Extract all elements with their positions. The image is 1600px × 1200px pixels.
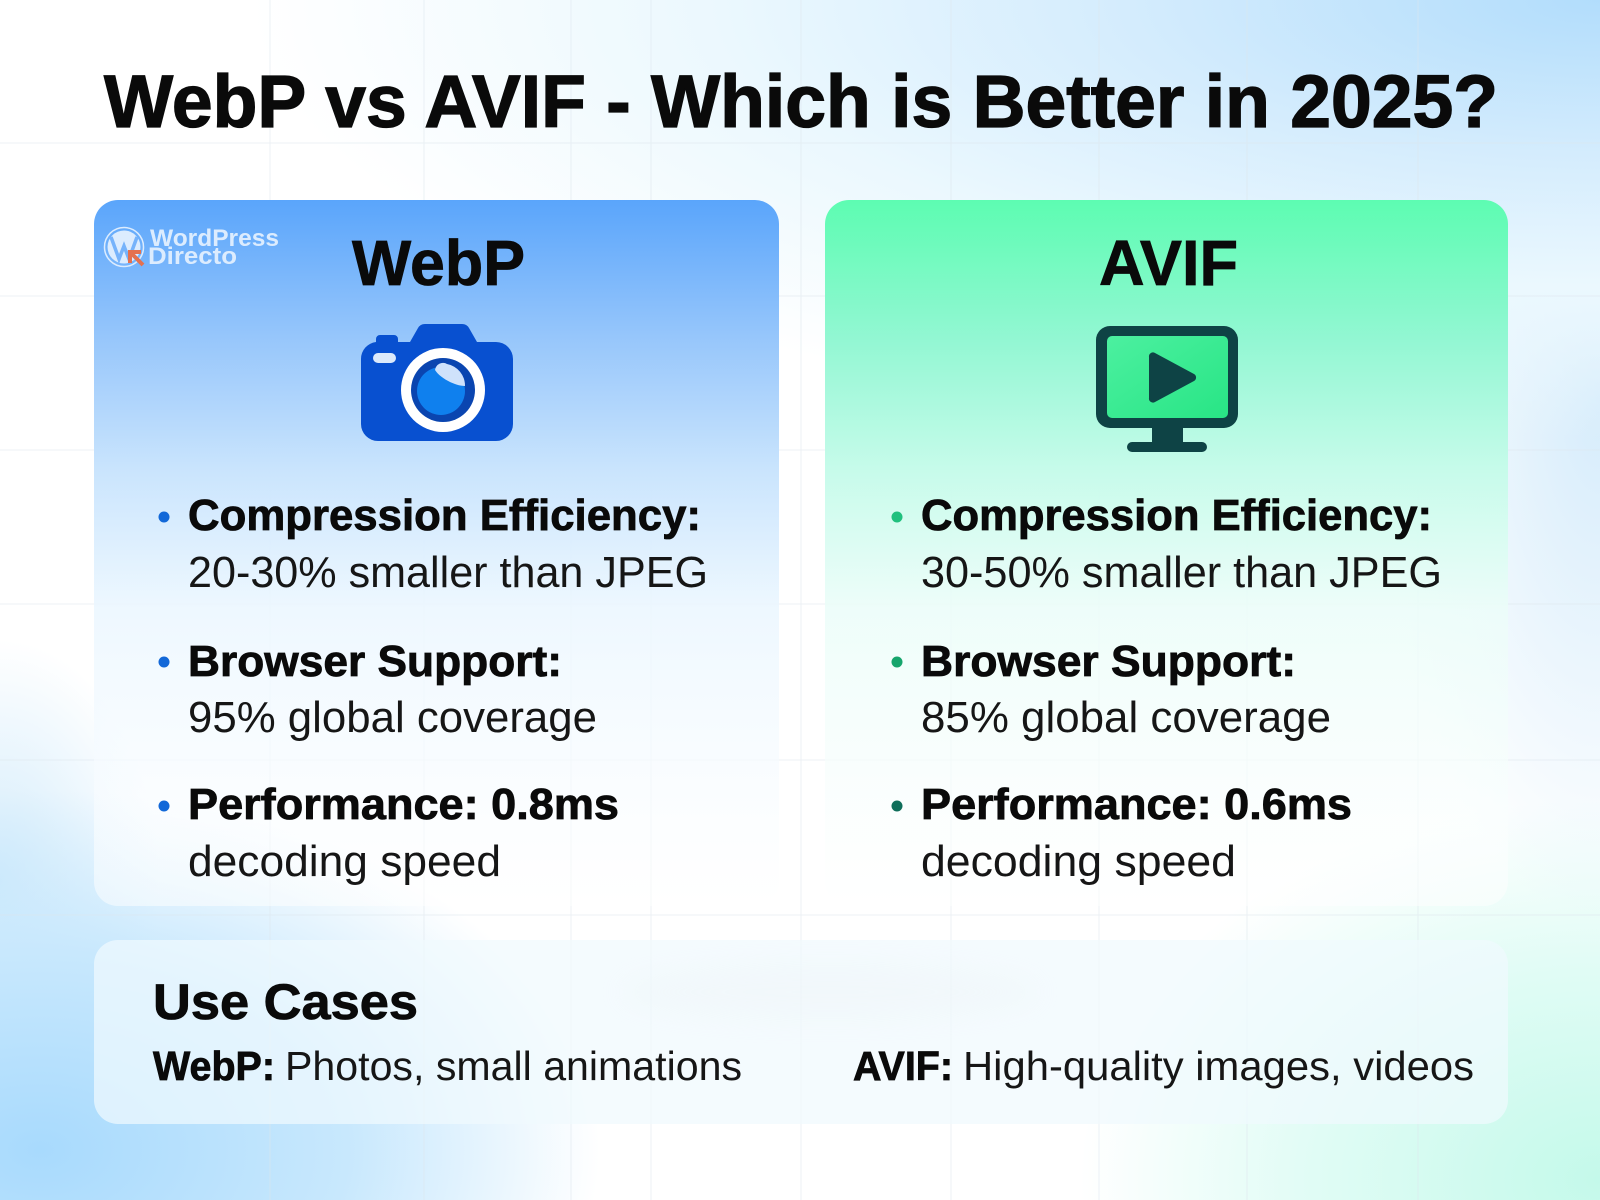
panel: use cases (94, 940, 1508, 1124)
feature: performance: Performance: 0.8ms (188, 780, 619, 829)
feature: compression efficiency: 30-50% smaller than JPEG (921, 548, 1442, 597)
feature: browser support (158, 637, 597, 742)
WebP use case: WebP: (153, 1043, 275, 1089)
feature: compression efficiency: Compression Efficiency: (921, 491, 1432, 540)
feature: browser support: Browser Support: (921, 637, 1296, 686)
feature: browser support: 95% global coverage (188, 693, 597, 742)
feature: compression efficiency: 20-30% smaller than JPEG (188, 548, 708, 597)
feature: performance (158, 780, 619, 886)
icon: monitor with play button (1096, 326, 1238, 452)
AVIF card background (825, 200, 1508, 906)
feature: compression efficiency: Compression Efficiency: (188, 491, 701, 540)
feature: performance: decoding speed (188, 837, 501, 886)
feature: performance (892, 780, 1352, 886)
feature: performance: Performance: 0.6ms (921, 780, 1352, 829)
heading: WebP: WebP (352, 227, 525, 299)
logo wordmark (148, 225, 279, 270)
feature: performance: decoding speed (921, 837, 1236, 886)
heading: use cases: Use Cases (153, 974, 418, 1030)
icon: WordPress logo (104, 228, 144, 266)
feature: compression efficiency (158, 491, 708, 597)
AVIF use case: High-quality images, videos (963, 1043, 1474, 1089)
panel: AVIF (825, 200, 1508, 906)
feature: browser support: 85% global coverage (921, 693, 1331, 742)
WebP card background (94, 200, 779, 906)
heading: AVIF: AVIF (1099, 227, 1238, 299)
watermark logo (104, 225, 279, 270)
panel: WebP (94, 200, 779, 906)
WebP use case: Photos, small animations (285, 1043, 742, 1089)
use cases background (94, 940, 1508, 1124)
title: WebP vs AVIF - Which is Better in 2025? (104, 60, 1498, 143)
icon: camera (361, 324, 513, 441)
logo wordmark: WordPress (150, 225, 279, 252)
feature: browser support (892, 637, 1331, 742)
logo wordmark: Directo (148, 243, 237, 270)
feature: compression efficiency (892, 491, 1442, 597)
feature: browser support: Browser Support: (188, 637, 562, 686)
AVIF use case: AVIF: (853, 1043, 953, 1089)
